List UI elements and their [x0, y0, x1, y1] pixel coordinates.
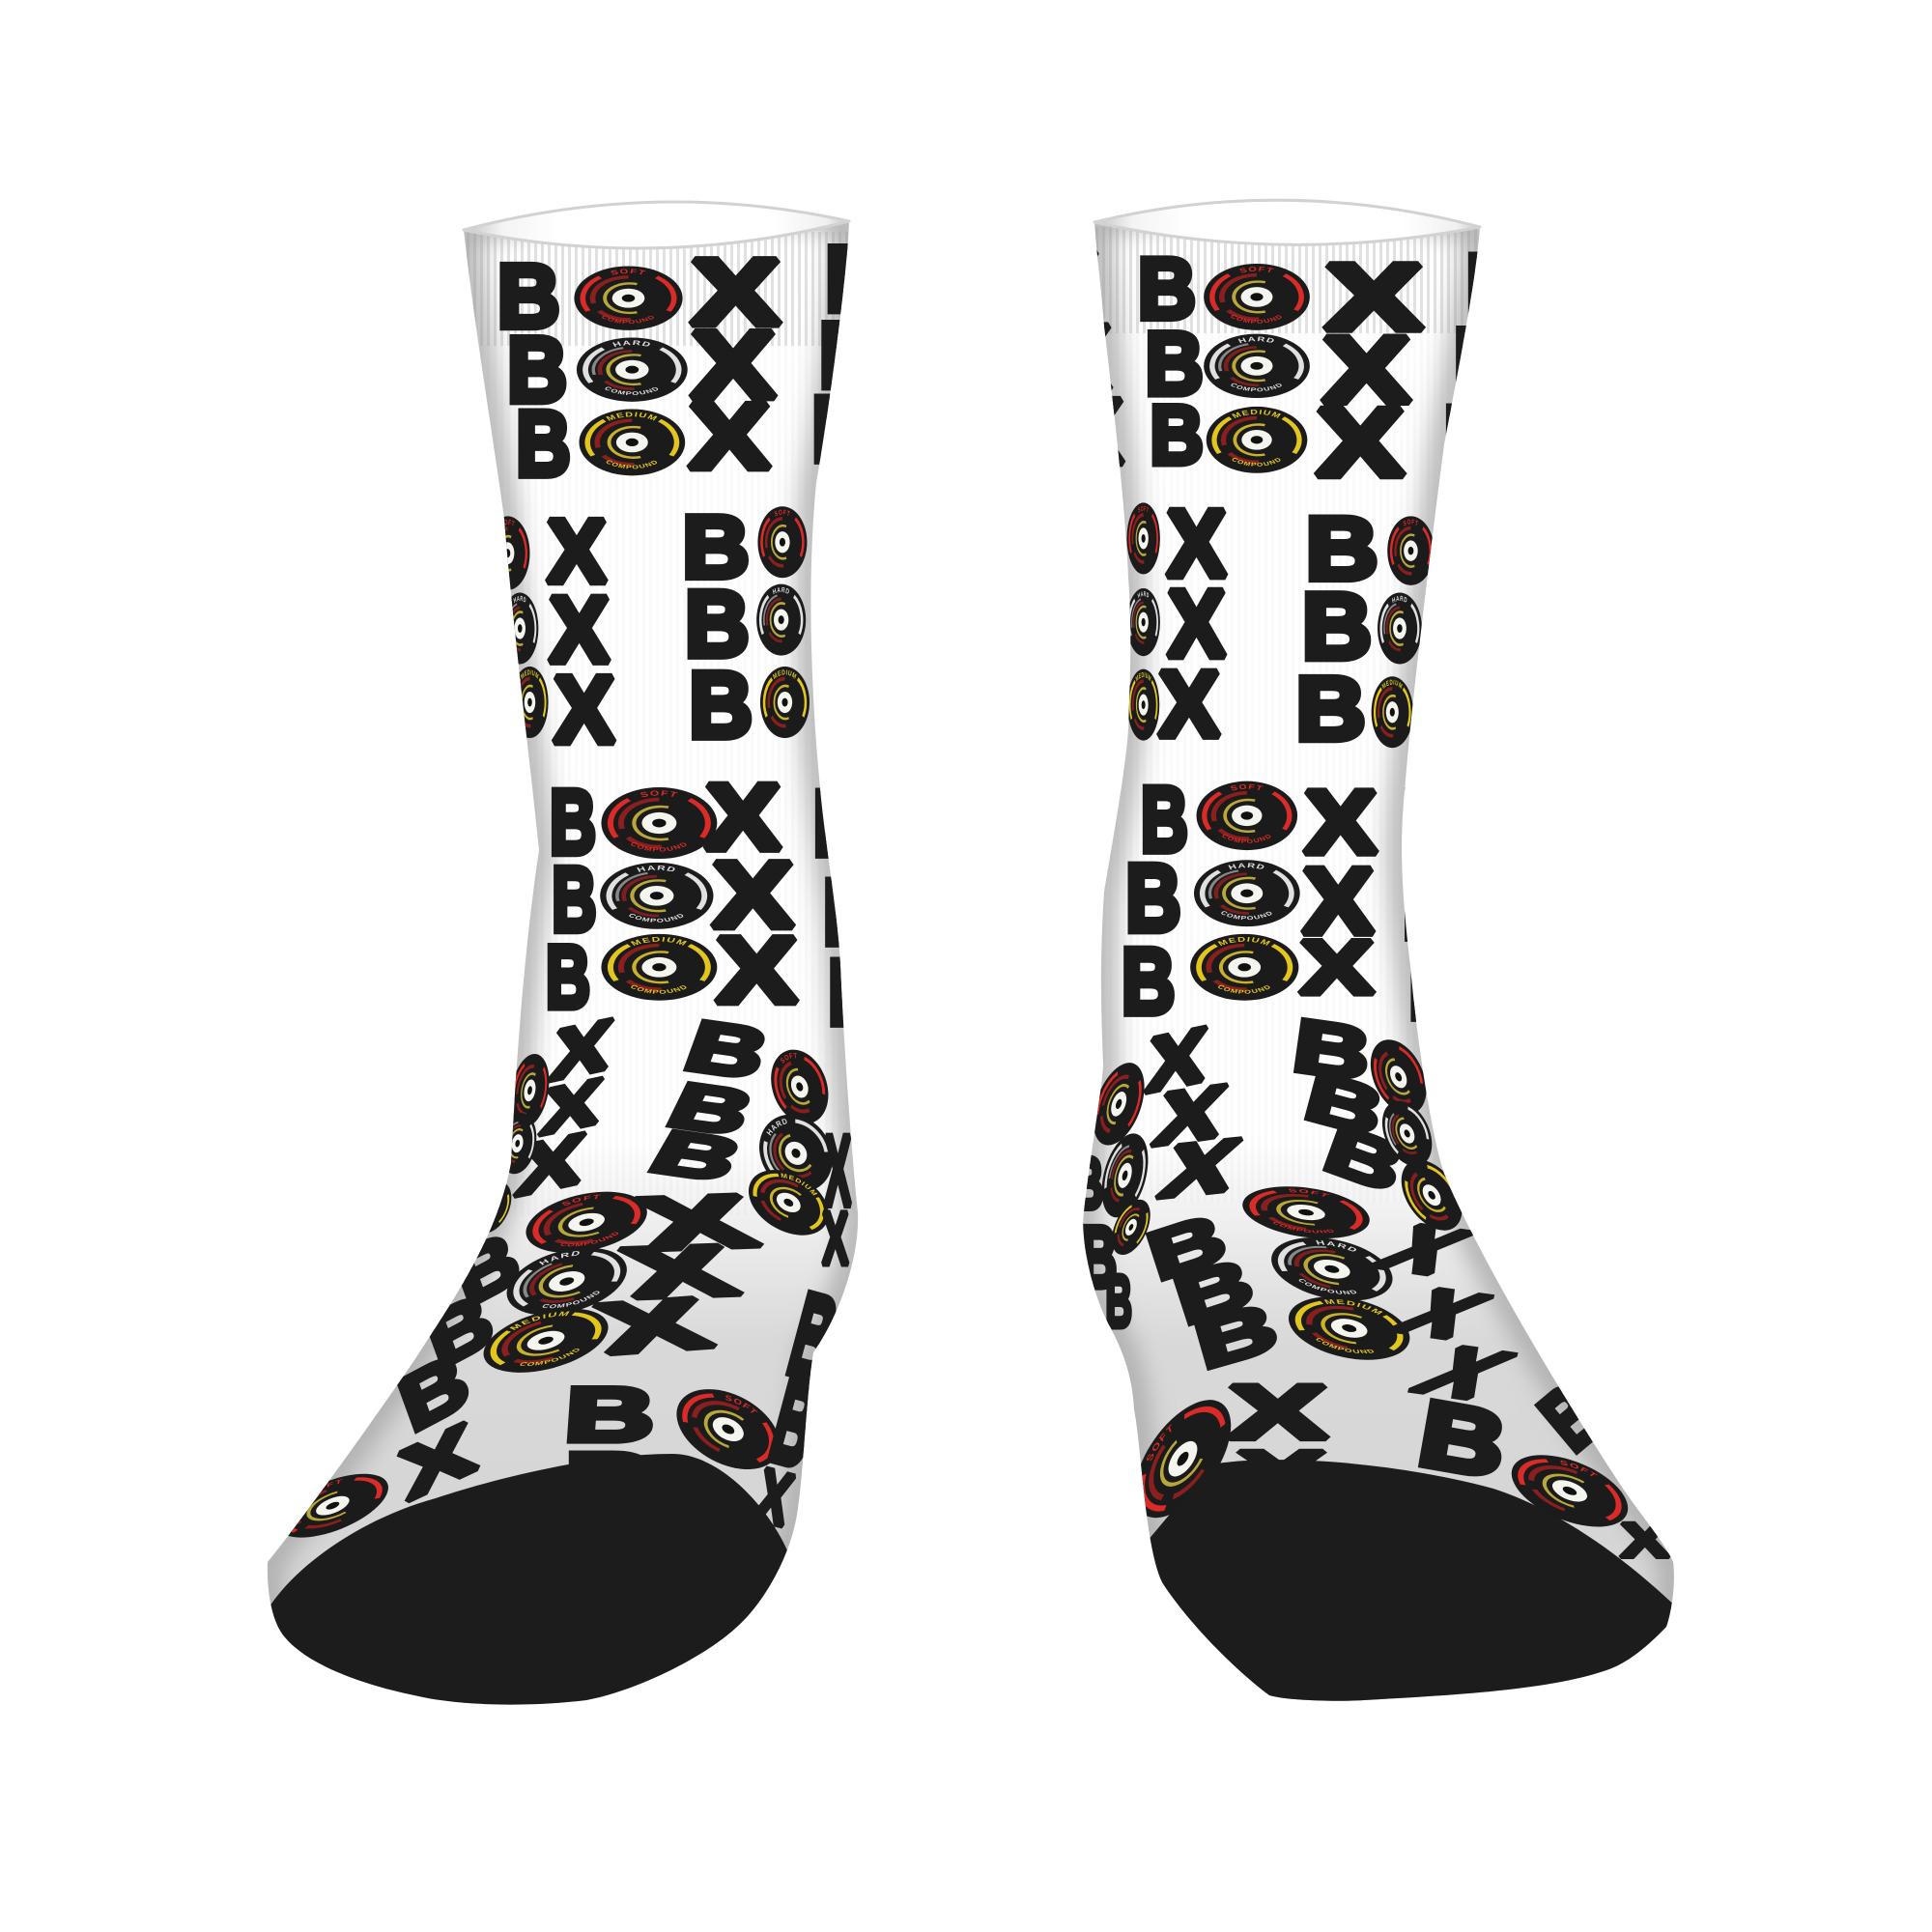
right sock shading and ribbing — [1063, 200, 1700, 1719]
row: BOX hard 1: HARD — [1238, 336, 1274, 344]
band 5 foot: tyres: COMPOUND — [1294, 1276, 1361, 1300]
band 6 foot: front row: X — [1236, 1438, 1326, 1507]
band 4 ankle right: tilted B and tyres: B — [1316, 1110, 1412, 1208]
band 5 foot: tyres: COMPOUND — [560, 1233, 618, 1246]
band 4 ankle right: tilted B and tyres: HARD — [766, 1119, 787, 1136]
band 2 left column: OX: X — [1167, 492, 1226, 597]
sock: left — [267, 201, 858, 1705]
edge letters top — [1096, 200, 1478, 468]
band 3 rows: SOFT — [640, 790, 678, 797]
row: BOX medium 1 — [518, 400, 773, 479]
row: BOX hard 1: COMPOUND — [1231, 383, 1282, 392]
band 4 ankle left: tilted X and tyres: X — [511, 1119, 590, 1212]
row: BOX hard 1: B — [1146, 314, 1203, 413]
row: BOX soft 1: B — [1138, 241, 1196, 337]
row: BOX medium 1: COMPOUND — [1233, 458, 1281, 467]
band 4 ankle left: tilted X and tyres: X — [1148, 1069, 1233, 1162]
left sock shading and ribbing — [267, 222, 858, 1705]
band 5 foot: tyres: MEDIUM — [1321, 1294, 1386, 1318]
band 5 foot: B column — [1146, 1217, 1277, 1372]
left sock toe — [270, 1454, 787, 1705]
band 3 rows — [547, 781, 844, 1028]
right sock rim opening — [1094, 200, 1480, 244]
edge letters top: X — [1045, 305, 1111, 409]
row: BOX hard 1: HARD — [612, 340, 650, 347]
band 2 right column: BO — [685, 506, 810, 741]
band 5 foot: B column: B — [388, 1336, 478, 1448]
band 5 foot: X column — [1372, 1223, 1519, 1401]
band 5 foot: tyres — [483, 1192, 647, 1373]
band 2 right column: BO: HARD — [773, 587, 789, 595]
band 5 foot: B column: B — [1139, 1200, 1235, 1295]
row: BOX soft 1: X — [692, 241, 780, 345]
row: BOX hard 1 — [1148, 329, 1413, 406]
band 6 foot: front row: SOFT — [1557, 1457, 1600, 1481]
band 3 rows: X — [1300, 924, 1374, 1009]
band 6 foot: front row: X — [1229, 1370, 1327, 1455]
band 6 foot: front row: B — [1523, 1367, 1619, 1468]
band 5 foot: X column: X — [626, 1179, 766, 1265]
row: BOX hard 1: COMPOUND — [605, 386, 659, 395]
band 2 right column: BO: B — [683, 498, 750, 596]
row: BOX soft 1: SOFT — [1239, 267, 1274, 272]
band 3 rows: B — [823, 860, 872, 963]
band 3 rows: B — [828, 940, 877, 1043]
edge letters top: B — [1466, 237, 1528, 336]
band 6 foot: front row: B — [565, 1438, 654, 1520]
row: BOX medium 1: MEDIUM — [1232, 410, 1281, 418]
band 3 rows: SOFT — [1229, 782, 1264, 792]
band 4 ankle right: tilted B and tyres: B — [675, 1006, 779, 1094]
band 4 ankle left: tilted X and tyres: B — [1105, 1260, 1132, 1343]
band 4 ankle right: tilted B and tyres — [647, 1018, 852, 1267]
band 2 right column: BO: B — [685, 573, 750, 676]
band 4 ankle left: tilted X and tyres: B — [1081, 1209, 1117, 1305]
sock: right — [1083, 199, 1674, 1701]
band 2 right column: BO: X — [817, 568, 883, 671]
band 4 ankle left: tilted X and tyres — [1083, 1024, 1244, 1329]
left sock body — [268, 202, 858, 1705]
band 3 rows: COMPOUND — [1215, 983, 1273, 995]
band 3 rows: B — [1122, 928, 1175, 1034]
band 2 right column: BO: B — [689, 652, 753, 757]
band 2 left column: OX: HARD — [514, 595, 526, 603]
band 3 rows: HARD — [637, 866, 675, 872]
band 3 rows: COMPOUND — [1220, 833, 1274, 845]
band 5 foot: tyres: HARD — [1314, 1237, 1360, 1255]
right sock toe — [1150, 1460, 1672, 1701]
band 6 foot: front row — [282, 1289, 837, 1590]
band 3 rows: X — [713, 842, 793, 947]
left sock rim opening — [464, 202, 849, 248]
band 5 foot: X column: X — [586, 1284, 720, 1369]
band 2 right column: BO: SOFT — [1403, 520, 1418, 526]
row: BOX soft 1 — [1140, 255, 1426, 333]
band 3 rows: COMPOUND — [631, 842, 686, 852]
band 5 foot: X column: X — [1394, 1334, 1532, 1412]
band 3 rows: COMPOUND — [1218, 909, 1275, 922]
row: BOX soft 1 — [499, 256, 783, 330]
band 3 rows: X — [705, 764, 781, 869]
row: BOX hard 1: X — [1322, 318, 1410, 422]
edge letters top: X — [1033, 231, 1098, 335]
band 4 ankle left: tilted X and tyres: X — [1143, 1011, 1210, 1110]
band 6 foot: front row: SOFT — [725, 1395, 757, 1413]
band 2 left column: OX: SOFT — [504, 520, 515, 526]
row: BOX medium 1 — [1151, 403, 1407, 479]
band 2 left column: OX: MEDIUM — [521, 669, 539, 680]
band 4 ankle right: tilted B and tyres — [1293, 1016, 1463, 1231]
band 5 foot: X column: X — [611, 1231, 747, 1313]
band 4 ankle right: tilted B and tyres: MEDIUM — [781, 1173, 817, 1196]
band 4 ankle right: tilted B and tyres: SOFT — [781, 1053, 797, 1063]
band 5 foot: X column — [591, 1192, 765, 1356]
band 5 foot: tyres: COMPOUND — [1312, 1336, 1378, 1359]
band 5 foot: tyres: COMPOUND — [520, 1349, 580, 1366]
left sock BOX pattern — [282, 201, 852, 1590]
band 4 ankle right: tilted B and tyres: B — [657, 1070, 765, 1149]
row: BOX medium 1: X — [689, 384, 770, 488]
band 5 foot: B column: B — [1187, 1289, 1285, 1383]
band 4 ankle left: tilted X and tyres: X — [546, 1004, 617, 1096]
row: BOX medium 1: B — [1150, 389, 1204, 482]
band 2 left column: OX — [1126, 502, 1229, 741]
row: BOX medium 1: B — [516, 393, 571, 496]
band 5 foot: X column: X — [1375, 1276, 1509, 1350]
band 6 foot: front row: SOFT — [1143, 1421, 1178, 1465]
band 2 right column: BO: X — [820, 650, 886, 753]
band 2 left column: OX: MEDIUM — [1136, 672, 1151, 682]
band 6 foot: front row: B — [759, 1354, 830, 1492]
row: BOX medium 1: MEDIUM — [606, 412, 657, 421]
band 3 rows: X — [1303, 848, 1374, 952]
band 4 ankle left: tilted X and tyres: X — [1151, 1123, 1249, 1213]
band 2 left column: OX: X — [554, 658, 614, 763]
band 2 left column: OX: X — [547, 500, 607, 601]
band 5 foot: B column: B — [417, 1278, 502, 1384]
row: BOX hard 1: X — [692, 313, 775, 418]
band 6 foot: front row: B — [1412, 1381, 1513, 1498]
band 2 left column: OX — [504, 516, 616, 746]
band 2 right column: BO: MEDIUM — [773, 669, 797, 680]
row: BOX soft 1: B — [497, 246, 559, 347]
edge letters top right: B — [825, 226, 888, 330]
right sock BOX pattern — [1083, 200, 1672, 1606]
band 3 rows: B — [546, 927, 590, 1027]
row: BOX medium 1: COMPOUND — [607, 460, 657, 469]
edge letters top: B — [1454, 311, 1516, 410]
band 5 foot: tyres: SOFT — [562, 1194, 601, 1206]
band 2 right column: BO: MEDIUM — [1381, 680, 1403, 692]
band 3 rows: B — [813, 771, 863, 875]
band 5 foot: X column: X — [1356, 1211, 1491, 1287]
band 5 foot: tyres: COMPOUND — [543, 1291, 600, 1308]
band 2 right column: BO: X — [820, 494, 886, 593]
band 2 left column: OX: HARD — [1138, 591, 1150, 599]
band 2 left column: OX: X — [1168, 570, 1225, 676]
band 3 rows: B — [1141, 768, 1188, 871]
row: BOX soft 1: COMPOUND — [1231, 315, 1282, 324]
band 3 rows: MEDIUM — [630, 937, 687, 946]
band 6 foot: front row: X — [747, 1453, 801, 1542]
band 3 rows: MEDIUM — [1216, 936, 1273, 948]
band 4 ankle left: tilted X and tyres: X — [536, 1065, 607, 1150]
band 6 foot: front row: B — [779, 1268, 848, 1405]
band 5 foot: tyres: MEDIUM — [510, 1312, 570, 1330]
band 2 right column: BO: B — [1302, 574, 1372, 678]
band 3 rows: COMPOUND — [629, 914, 684, 923]
band 5 foot: tyres: SOFT — [1287, 1186, 1331, 1200]
band 4 ankle right: tilted B and tyres: X — [825, 1117, 851, 1226]
band 5 foot: tyres: HARD — [539, 1251, 580, 1265]
band 5 foot: tyres — [1242, 1186, 1410, 1360]
band 3 rows: B — [1403, 853, 1456, 958]
band 3 rows: X — [716, 918, 797, 1022]
band 4 ankle right: tilted B and tyres: B — [1289, 1004, 1376, 1095]
band 3 rows: B — [1403, 771, 1456, 876]
row: BOX soft 1: X — [1325, 244, 1422, 350]
band 6 foot: front row — [1141, 1383, 1671, 1559]
band 2 left column: OX: X — [1158, 652, 1219, 756]
band 3 rows: B — [1408, 933, 1463, 1038]
band 4 ankle right: tilted B and tyres: X — [822, 1196, 848, 1280]
band 3 rows: HARD — [1227, 862, 1266, 871]
row: BOX hard 1: B — [507, 319, 567, 422]
row: BOX medium 1: X — [1317, 389, 1404, 497]
band 2 right column: BO: SOFT — [775, 510, 790, 516]
band 3 rows: X — [1304, 772, 1377, 872]
band 6 foot: front row: SOFT — [323, 1479, 342, 1490]
band 3 rows: COMPOUND — [631, 985, 686, 994]
band 2 left column: OX: SOFT — [1138, 506, 1150, 512]
band 3 rows: B — [550, 772, 596, 873]
band 2 right column: BO — [1298, 514, 1433, 748]
band 6 foot: front row: B — [562, 1372, 658, 1458]
band 6 foot: front row: X — [393, 1407, 482, 1516]
band 3 rows: B — [552, 849, 596, 952]
row: BOX soft 1: COMPOUND — [602, 315, 654, 325]
edge letters top: X — [1058, 379, 1123, 483]
band 6 foot: front row: X — [1620, 1513, 1669, 1568]
edge letters top right: B — [811, 377, 874, 481]
edge letters top right — [813, 243, 848, 465]
band 2 right column: BO: B — [1296, 659, 1365, 759]
band 5 foot: tyres: COMPOUND — [1269, 1220, 1338, 1237]
right sock body — [1083, 200, 1674, 1701]
edge letters top right: B — [819, 303, 881, 407]
band 4 ankle left: tilted X and tyres: B — [1072, 1142, 1103, 1225]
band 5 foot: B column: B — [1166, 1244, 1262, 1339]
band 5 foot: B column — [397, 1236, 520, 1435]
band 2 left column: OX: X — [549, 579, 610, 683]
band 4 ankle left: tilted X and tyres — [489, 1016, 615, 1233]
row: BOX soft 1: SOFT — [611, 269, 645, 274]
band 5 foot: B column: B — [444, 1216, 528, 1322]
band 4 ankle right: tilted B and tyres: B — [1298, 1058, 1390, 1151]
band 2 right column: BO: HARD — [1391, 595, 1406, 603]
band 3 rows: B — [1125, 845, 1180, 952]
band 4 ankle right: tilted B and tyres: B — [638, 1119, 754, 1194]
band 3 rows — [1123, 781, 1416, 1022]
band 2 right column: BO: B — [1306, 499, 1378, 598]
edge letters top: B — [1444, 388, 1506, 488]
row: BOX hard 1 — [510, 328, 779, 406]
